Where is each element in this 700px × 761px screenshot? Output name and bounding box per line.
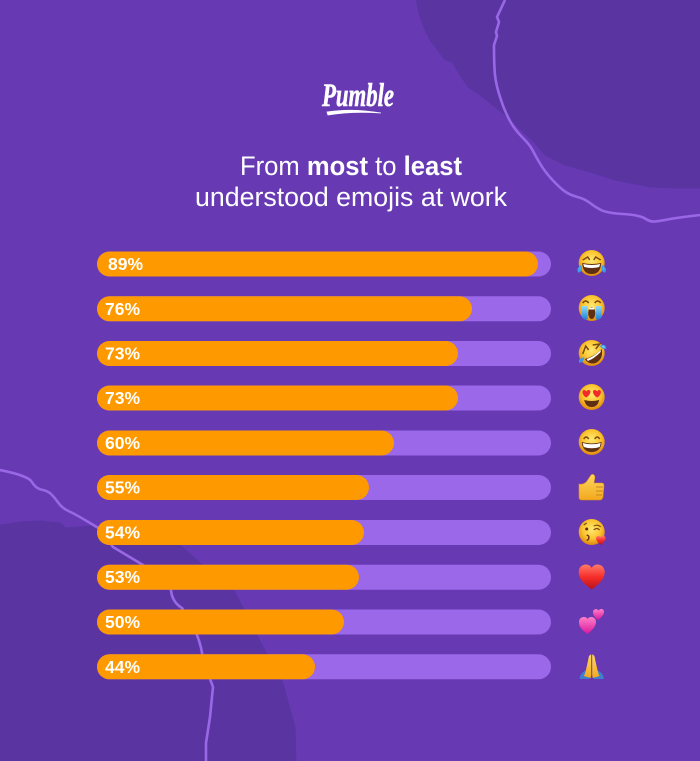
title: From most to least	[240, 151, 462, 181]
row: 76%: 76%	[105, 299, 140, 319]
icon: face blowing a kiss	[579, 519, 606, 545]
logo: Pumble: Pumble	[321, 78, 394, 114]
row: 50%: 50%	[105, 612, 140, 632]
row: 44%: 44%	[105, 657, 140, 677]
row: 55%	[97, 475, 551, 500]
row: 60%: 60%	[105, 433, 140, 453]
title	[195, 151, 507, 212]
background blob: top right	[416, 0, 700, 188]
row: 44%	[97, 654, 551, 679]
row: 50%	[97, 610, 551, 634]
icon: thumbs up	[579, 474, 604, 500]
row: 73% first	[97, 341, 551, 366]
row: 54%: 54%	[105, 522, 140, 542]
icon: loudly crying	[579, 295, 605, 321]
background line: bottom left	[0, 470, 213, 761]
bar chart	[97, 252, 551, 679]
icon: two hearts	[579, 609, 604, 634]
logo: Pumble	[321, 78, 394, 115]
row: 73% second: 73%	[105, 388, 140, 408]
icon: red heart	[579, 564, 605, 590]
title: understood emojis at work	[195, 182, 507, 212]
row: 54%	[97, 520, 551, 545]
background blob: bottom left	[0, 521, 296, 761]
row: 55%: 55%	[105, 478, 140, 498]
row: 89%	[97, 252, 551, 276]
row: 53%	[97, 565, 551, 590]
row: 73% first: 73%	[105, 344, 140, 364]
row: 89%: 89%	[108, 254, 143, 274]
icon: folded hands	[580, 654, 604, 679]
icon: heart eyes	[579, 384, 605, 410]
row: 73% second	[97, 386, 551, 410]
row: 60%	[97, 430, 551, 456]
background line: top right	[494, 0, 700, 222]
icon: rolling on the floor laughing	[579, 340, 606, 366]
icon: tears of joy	[578, 250, 605, 276]
icon: beaming grin	[579, 429, 605, 455]
row: 53%: 53%	[105, 567, 140, 587]
row: 76%	[97, 296, 551, 321]
